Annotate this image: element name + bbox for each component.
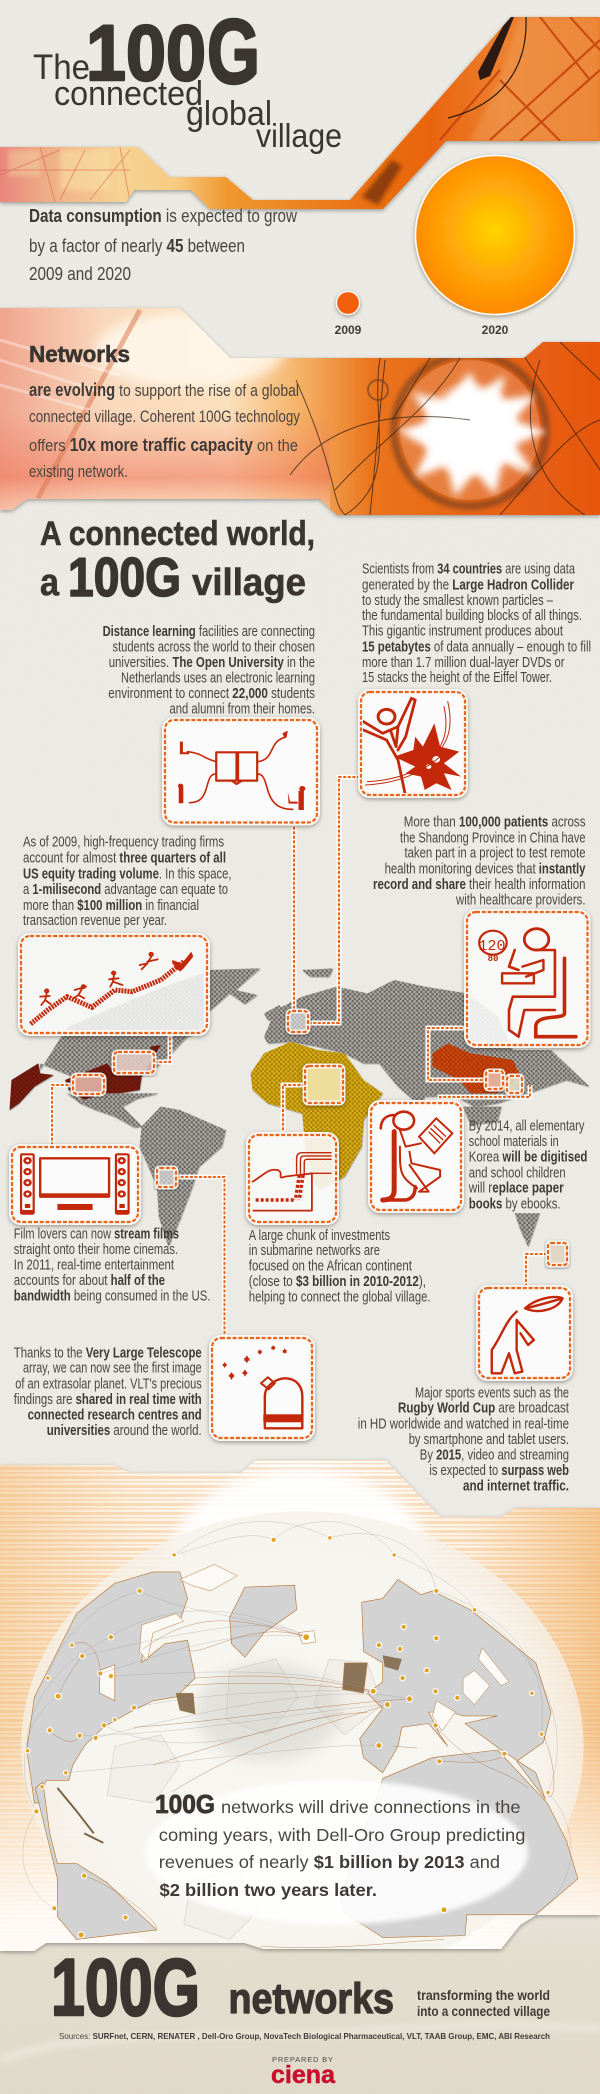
- section heading: 100G: [68, 546, 181, 608]
- text: submarine investments: focused on the African continent: [249, 1259, 412, 1275]
- text: high-frequency trading: US equity trading volume. In this space,: [23, 866, 232, 882]
- footer headline: transforming the world: [417, 1987, 550, 2003]
- globe with network connections: [21, 1511, 584, 1981]
- globe callout text: coming years, with Dell-Oro Group predicting: [159, 1825, 526, 1845]
- networks band: [0, 308, 600, 515]
- text: submarine investments: (close to $3 billion in 2010-2012),: [249, 1274, 426, 1290]
- panel: home cinema icon: [12, 1147, 138, 1222]
- title: village: [256, 117, 342, 154]
- text: film streaming: bandwidth being consumed in the US.: [14, 1289, 210, 1305]
- icon: rugby player and ball: [492, 1297, 563, 1373]
- text: high-frequency trading: more than $100 million in financial: [23, 898, 199, 914]
- text: submarine investments: [249, 1228, 430, 1306]
- text: high-frequency trading: As of 2009, high-frequency trading firms: [23, 835, 224, 851]
- text: film streaming: [14, 1226, 210, 1305]
- networks text: existing network.: [29, 462, 128, 481]
- text: telehealth: health monitoring devices that instantly: [385, 861, 586, 877]
- header banner with orange texture: [0, 17, 600, 209]
- text: distance learning: Distance learning facilities are connecting: [103, 624, 315, 640]
- panel: submarine networks icon: [249, 1135, 336, 1222]
- text: very large telescope: Thanks to the Very Large Telescope: [14, 1345, 202, 1361]
- panel: health monitoring icon: [467, 912, 588, 1045]
- text: very large telescope: connected research centres and: [28, 1407, 202, 1423]
- icon: scientist with particle collision: [364, 698, 461, 797]
- title: G: [207, 1, 260, 103]
- text: submarine investments: helping to connect the global village.: [249, 1290, 430, 1306]
- icon: television and speakers: [21, 1154, 129, 1214]
- text: film streaming: accounts for about half of the: [14, 1273, 165, 1289]
- footer headline: 100G: [51, 1943, 200, 2033]
- text: film streaming: Film lovers can now stream films: [14, 1226, 179, 1242]
- prepared by ciena logo: ciena: [271, 2061, 336, 2089]
- text: korea ebooks: and school children: [469, 1165, 566, 1181]
- text: telehealth: More than 100,000 patients across: [404, 815, 586, 831]
- data consumption text: by a factor of nearly 45 between: [29, 235, 245, 256]
- icon: schoolchild reading tablet: [381, 1112, 452, 1200]
- text: very large telescope: universities around the world.: [47, 1423, 202, 1439]
- connector lines: [52, 777, 547, 1338]
- networks text: connected village. Coherent 100G technology: [29, 407, 300, 426]
- prepared by ciena logo: PREPARED BY: [272, 2055, 333, 2064]
- text: distance learning: students across the world to their chosen: [112, 640, 315, 656]
- text: rugby world cup: Rugby World Cup are broadcast: [398, 1401, 569, 1417]
- panel: health monitoring icon: 120: [478, 938, 506, 955]
- icon: book with connected students: [178, 731, 305, 810]
- text: film streaming: straight onto their home cinemas.: [14, 1242, 178, 1258]
- footer headline: into a connected village: [417, 2003, 550, 2019]
- sources: Sources: SURFnet, CERN, RENATER , Dell-Oro Group, NovaTech Biological Pharmaceutical, VLT, TAAB Group, EMC, ABI Research: [59, 2031, 550, 2041]
- section heading: a: [40, 562, 60, 604]
- text: korea ebooks: will replace paper: [468, 1181, 564, 1197]
- title: global: [186, 95, 272, 133]
- text: high-frequency trading: transaction revenue per year.: [23, 913, 167, 929]
- footer headline: [51, 1943, 550, 2033]
- text: korea ebooks: books by ebooks.: [469, 1196, 561, 1212]
- bubble chart: 2009 vs 2020 data: [335, 156, 574, 337]
- text: film streaming: In 2011, real-time entertainment: [14, 1257, 174, 1273]
- globe band background: [0, 1460, 600, 1955]
- bubble chart: 2009 vs 2020 data: 2009: [335, 323, 362, 337]
- title: connected: [54, 75, 203, 113]
- globe callout text: [155, 1789, 526, 1900]
- bubble chart: 2009 vs 2020 data: 2020: [482, 323, 509, 337]
- icon: patient with blood pressure monitor: [479, 929, 576, 1037]
- text: distance learning: universities. The Open University in the: [109, 655, 315, 671]
- text: rugby world cup: is expected to surpass web: [429, 1463, 569, 1479]
- text: high-frequency trading: a 1-milisecond advantage can equate to: [23, 882, 228, 898]
- networks text: offers 10x more traffic capacity on the: [29, 435, 298, 455]
- data consumption text: Data consumption is expected to grow: [29, 205, 298, 226]
- text: telehealth: [373, 815, 586, 908]
- text: distance learning: and alumni from their homes.: [170, 702, 315, 718]
- section heading: A connected world,: [40, 515, 315, 553]
- text: distance learning: [103, 624, 315, 718]
- section heading: [40, 515, 315, 608]
- text: submarine investments: in submarine networks are: [249, 1243, 380, 1259]
- networks text: Networks: [29, 341, 130, 367]
- text: high-frequency trading: [23, 835, 232, 929]
- panel: trading icon: [21, 936, 207, 1033]
- text: korea ebooks: [468, 1119, 587, 1212]
- globe callout text: 100G: [155, 1789, 215, 1819]
- text: submarine investments: A large chunk of investments: [249, 1228, 390, 1244]
- panel: health monitoring icon: 80: [488, 954, 498, 964]
- text: high-frequency trading: account for almost three quarters of all: [23, 850, 226, 866]
- text: rugby world cup: [358, 1385, 569, 1495]
- text: large hadron collider: [362, 562, 591, 686]
- text: very large telescope: array, we can now see the first image: [23, 1361, 202, 1377]
- text: very large telescope: findings are shared in real time with: [14, 1392, 202, 1408]
- globe callout text: networks will drive connections in the: [221, 1797, 520, 1817]
- title: [33, 1, 342, 154]
- data consumption text: [29, 205, 298, 284]
- text: large hadron collider: generated by the Large Hadron Collider: [362, 578, 574, 594]
- icon: runners climbing a rising line: [31, 952, 193, 1024]
- icon: observatory and stars: [222, 1345, 303, 1428]
- title: 100: [86, 8, 206, 97]
- icon: submarine cable beneath the waves: [253, 1153, 331, 1211]
- text: rugby world cup: and internet traffic.: [463, 1479, 569, 1495]
- networks text: are evolving to support the rise of a global: [29, 380, 299, 400]
- small map markers: [73, 1011, 567, 1265]
- text: korea ebooks: school materials in: [469, 1134, 559, 1150]
- text: very large telescope: of an extrasolar planet. VLT's precious: [15, 1376, 202, 1392]
- title: The: [33, 48, 90, 87]
- globe callout text: $2 billion two years later.: [160, 1880, 377, 1900]
- text: distance learning: environment to connect 22,000 students: [108, 686, 315, 702]
- panel: rugby icon: [479, 1288, 570, 1378]
- footer headline: networks: [228, 1975, 394, 2023]
- text: very large telescope: [14, 1345, 202, 1439]
- text: large hadron collider: Scientists from 34 countries are using data: [362, 562, 576, 578]
- section heading: village: [192, 562, 306, 604]
- panel: open university icon: [165, 720, 317, 822]
- text: distance learning: Netherlands uses an electronic learning: [121, 670, 315, 686]
- panel: large hadron collider icon: [361, 692, 465, 797]
- world map: [10, 968, 589, 1247]
- text: rugby world cup: By 2015, video and streaming: [420, 1447, 569, 1463]
- networks text: [29, 341, 300, 481]
- panel: e-book icon: [371, 1103, 461, 1210]
- data consumption text: 2009 and 2020: [29, 263, 131, 284]
- globe callout text: revenues of nearly $1 billion by 2013 and: [159, 1852, 500, 1872]
- panel: very large telescope icon: [212, 1338, 312, 1438]
